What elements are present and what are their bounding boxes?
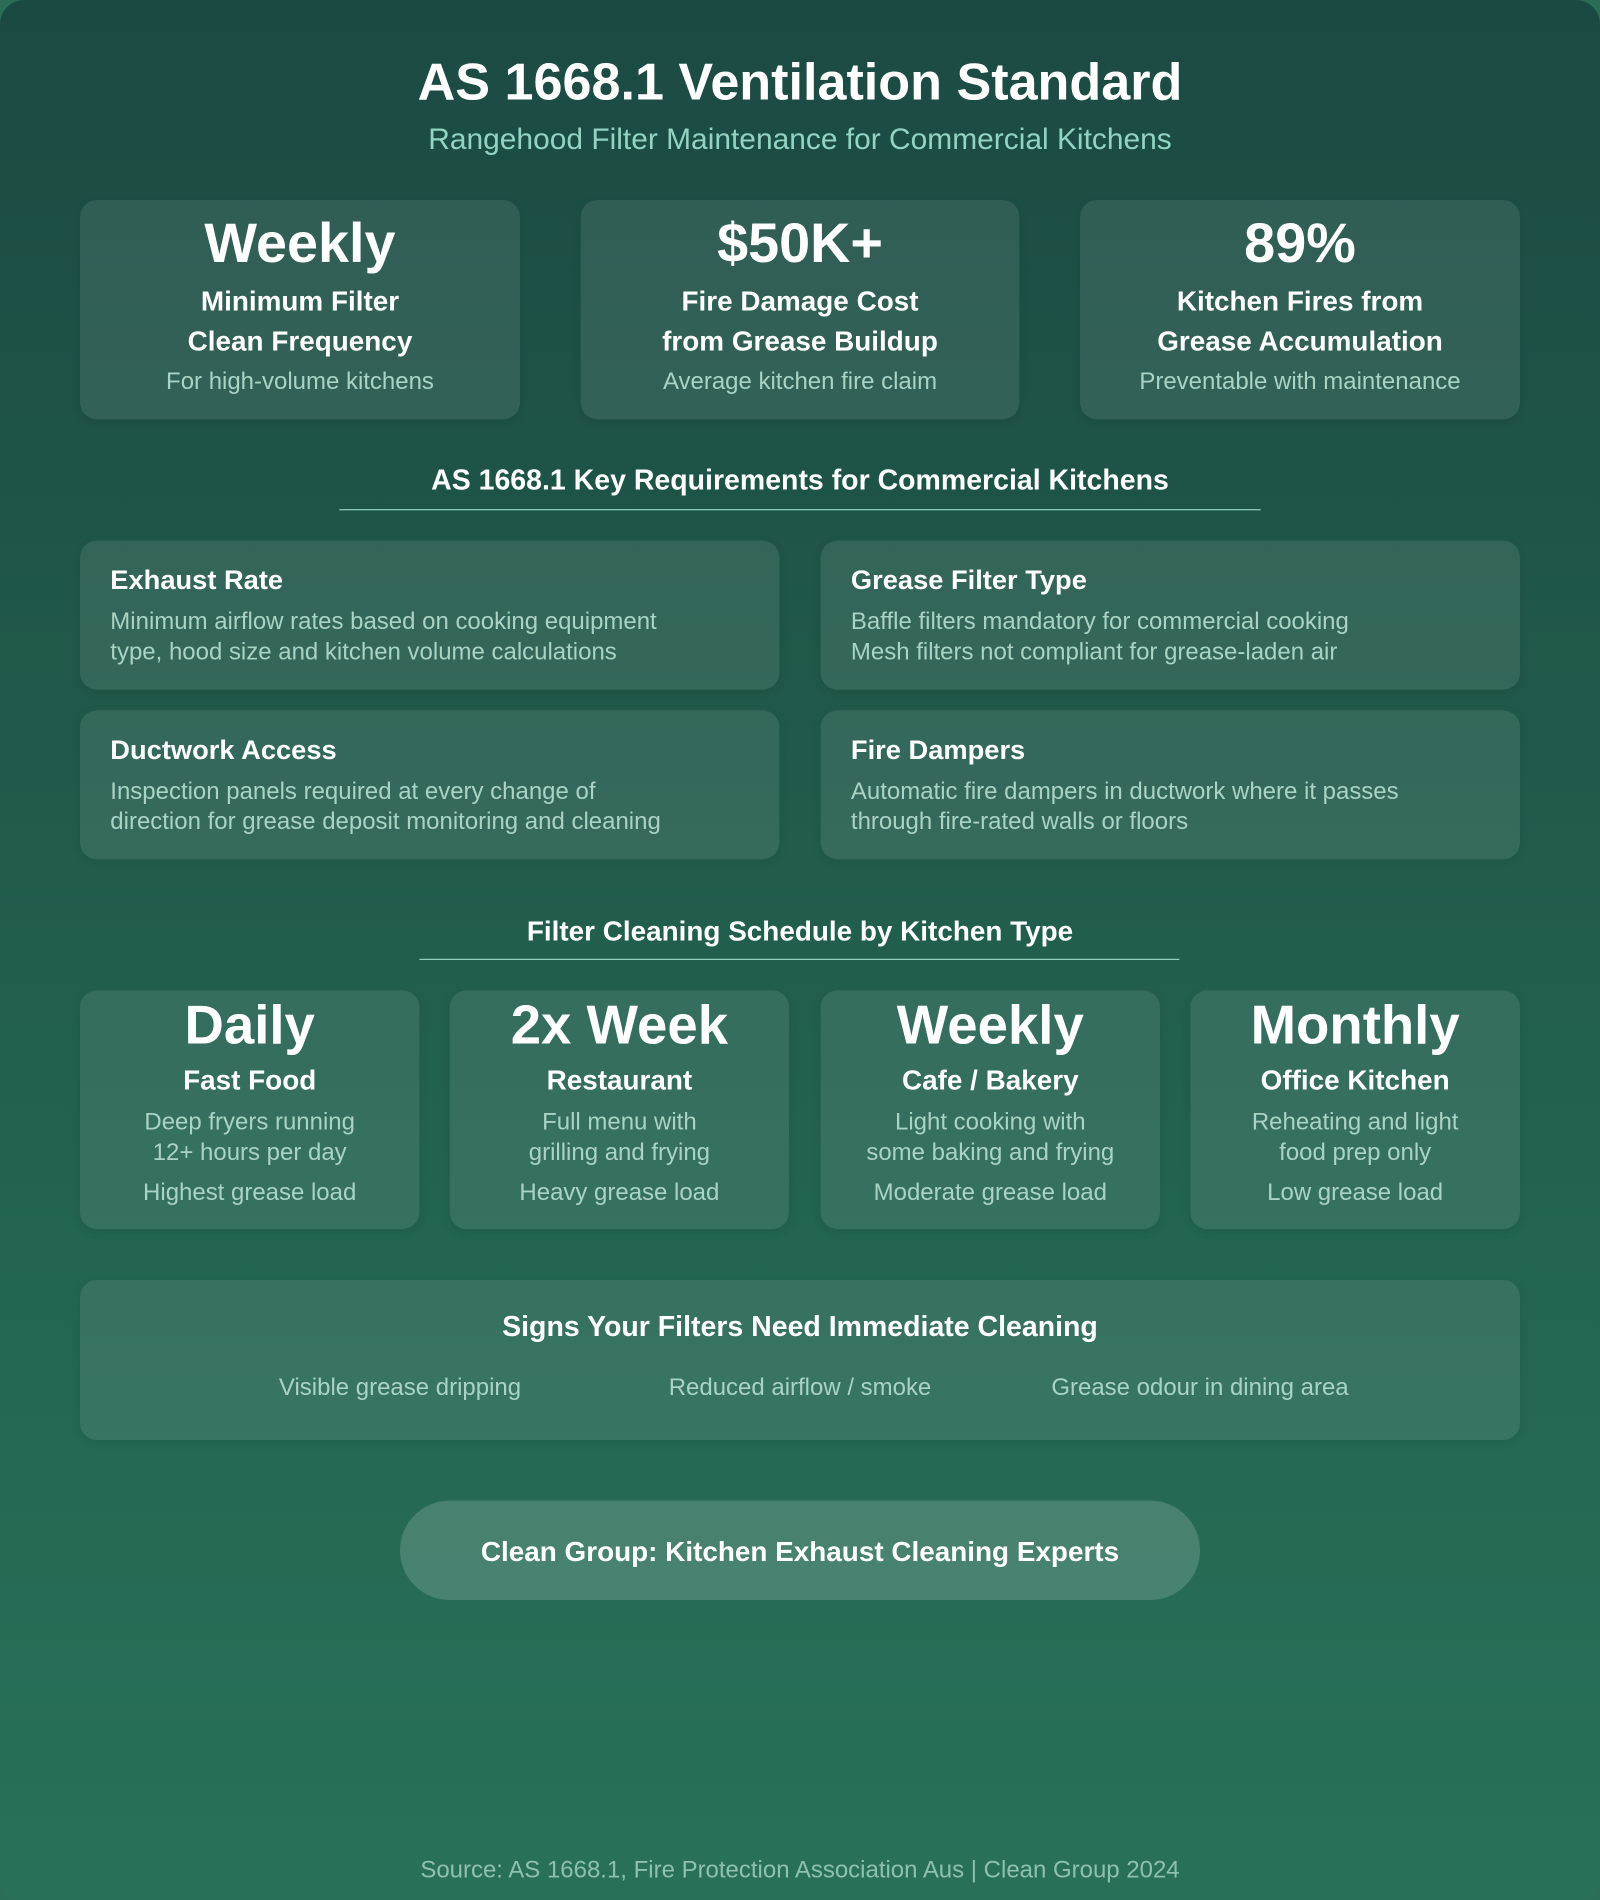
schedule card: weekly: some baking and frying xyxy=(866,1139,1114,1166)
panel: signs xyxy=(80,1280,1520,1440)
stat card: weekly xyxy=(80,200,520,419)
title: AS 1668.1 Ventilation Standard xyxy=(418,53,1182,112)
schedule card: weekly: Light cooking with xyxy=(895,1109,1086,1136)
cta button: Clean Group: Kitchen Exhaust Cleaning Experts xyxy=(481,1536,1119,1567)
stat card: cost: Average kitchen fire claim xyxy=(663,368,937,395)
stat card: weekly: Weekly xyxy=(204,211,396,274)
section heading: schedule: Filter Cleaning Schedule by Kitchen Type xyxy=(527,915,1073,947)
schedule card: monthly: food prep only xyxy=(1279,1139,1431,1166)
req card: ductwork access: Inspection panels required at every change of xyxy=(110,778,595,805)
panel: signs: Reduced airflow / smoke xyxy=(669,1375,931,1401)
schedule card: weekly: Weekly xyxy=(897,994,1084,1056)
req card: exhaust rate: Minimum airflow rates based on cooking equipment xyxy=(110,608,657,635)
schedule card: 2x week xyxy=(450,990,789,1229)
signs heading: Signs Your Filters Need Immediate Cleaning xyxy=(502,1310,1098,1342)
schedule card: daily: Fast Food xyxy=(183,1064,316,1096)
panel: signs: Visible grease dripping xyxy=(279,1375,521,1401)
schedule card: daily: 12+ hours per day xyxy=(153,1139,347,1166)
schedule card: daily: Daily xyxy=(185,994,315,1056)
section heading: requirements: AS 1668.1 Key Requirements for Commercial Kitchens xyxy=(431,464,1169,496)
req card: exhaust rate xyxy=(80,541,779,690)
req card: fire dampers: through fire-rated walls or floors xyxy=(851,808,1188,835)
req card: exhaust rate: type, hood size and kitchen volume calculations xyxy=(110,639,617,665)
req card: grease filter type: Baffle filters mandatory for commercial cooking xyxy=(851,608,1349,635)
stat card: weekly: For high-volume kitchens xyxy=(166,368,434,395)
req card: ductwork access: Ductwork Access xyxy=(110,735,337,765)
req card: grease filter type xyxy=(821,541,1520,690)
stat card: 89%: Preventable with maintenance xyxy=(1139,368,1461,395)
stat card: cost: Fire Damage Cost xyxy=(681,285,919,316)
req card: ductwork access xyxy=(80,710,779,859)
subtitle: Rangehood Filter Maintenance for Commercial Kitchens xyxy=(428,124,1172,156)
schedule card: weekly: Moderate grease load xyxy=(874,1179,1107,1206)
stat card: cost: $50K+ xyxy=(717,211,883,274)
schedule card: 2x week: Heavy grease load xyxy=(519,1179,719,1206)
req card: ductwork access: direction for grease deposit monitoring and cleaning xyxy=(110,808,661,835)
stat card: 89%: 89% xyxy=(1244,211,1356,274)
req card: fire dampers: Fire Dampers xyxy=(851,735,1025,765)
schedule card: daily: Highest grease load xyxy=(143,1179,356,1206)
stat card: cost: from Grease Buildup xyxy=(662,325,938,356)
req card: fire dampers: Automatic fire dampers in ductwork where it passes xyxy=(851,778,1399,805)
schedule card: 2x week: Restaurant xyxy=(547,1064,692,1096)
req card: exhaust rate: Exhaust Rate xyxy=(110,565,283,595)
stat card: 89%: Grease Accumulation xyxy=(1157,325,1443,356)
footer source: Source: AS 1668.1, Fire Protection Association Aus | Clean Group 2024 xyxy=(420,1857,1180,1884)
schedule card: 2x week: Full menu with xyxy=(542,1109,697,1136)
schedule card: weekly: Cafe / Bakery xyxy=(902,1064,1079,1096)
panel: signs: Grease odour in dining area xyxy=(1051,1375,1349,1401)
cta button xyxy=(400,1501,1200,1600)
schedule card: 2x week: 2x Week xyxy=(511,994,728,1056)
schedule card: monthly: Office Kitchen xyxy=(1261,1064,1450,1096)
stat card: weekly: Clean Frequency xyxy=(188,325,412,356)
req card: grease filter type: Mesh filters not compliant for grease-laden air xyxy=(851,639,1337,665)
schedule card: monthly: Monthly xyxy=(1251,994,1460,1056)
schedule card: daily: Deep fryers running xyxy=(144,1109,355,1136)
req card: grease filter type: Grease Filter Type xyxy=(851,565,1087,595)
schedule card: daily xyxy=(80,990,419,1229)
req card: fire dampers xyxy=(821,710,1520,859)
schedule card: monthly: Low grease load xyxy=(1267,1179,1443,1206)
stat card: 89% xyxy=(1080,200,1520,419)
schedule card: weekly xyxy=(821,990,1160,1229)
schedule card: monthly: Reheating and light xyxy=(1252,1109,1458,1136)
schedule card: monthly xyxy=(1190,990,1520,1229)
sign items xyxy=(279,1375,1349,1401)
stat card: weekly: Minimum Filter xyxy=(201,285,399,316)
stat card: cost xyxy=(581,200,1019,419)
stat card: 89%: Kitchen Fires from xyxy=(1177,285,1423,316)
schedule card: 2x week: grilling and frying xyxy=(529,1139,710,1166)
